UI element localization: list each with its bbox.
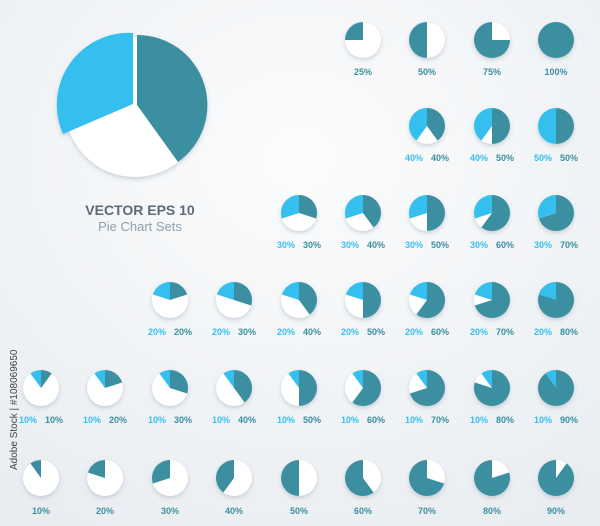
row: single teal — [23, 460, 574, 516]
row: single teal: 50% — [290, 506, 308, 516]
row: single teal: 70% — [418, 506, 436, 516]
row: 10% blue: 70% — [431, 415, 449, 425]
row: 10% blue: 90% — [560, 415, 578, 425]
row: 30% blue — [277, 195, 578, 250]
row: 20% blue: 20% — [277, 327, 295, 337]
row: 10% blue: 10% — [212, 415, 230, 425]
row: 10% blue: 10% — [277, 415, 295, 425]
row: 20% blue: 40% — [303, 327, 321, 337]
row: 20% blue — [148, 282, 578, 337]
row: 20% blue: 20% — [405, 327, 423, 337]
row: 10% blue: 10% — [405, 415, 423, 425]
row: quarters: 25% — [354, 67, 372, 77]
row: 20% blue: 20% — [212, 327, 230, 337]
row: 10% blue: 10% — [19, 415, 37, 425]
row: 10% blue: 10% — [148, 415, 166, 425]
row: single teal: 80% — [483, 506, 501, 516]
row: 20% blue: 30% — [238, 327, 256, 337]
title: Pie Chart Sets — [98, 219, 182, 234]
row: 10% blue — [19, 370, 578, 425]
big pie chart — [57, 33, 207, 177]
row: 30% blue: 30% — [470, 240, 488, 250]
row: 40/50: 40% — [405, 153, 423, 163]
row: 40/50: 50% — [560, 153, 578, 163]
row: quarters: 50% — [418, 67, 436, 77]
row: single teal: 40% — [225, 506, 243, 516]
row: 10% blue: 40% — [238, 415, 256, 425]
row: 10% blue: 10% — [534, 415, 552, 425]
row: 30% blue: 30% — [405, 240, 423, 250]
row: 20% blue: 50% — [367, 327, 385, 337]
row: 40/50 — [405, 108, 578, 163]
row: 40/50: 50% — [496, 153, 514, 163]
row: single teal: 10% — [32, 506, 50, 516]
row: single teal: 20% — [96, 506, 114, 516]
row: 30% blue: 30% — [341, 240, 359, 250]
row: 40/50: 40% — [431, 153, 449, 163]
row: 20% blue: 20% — [470, 327, 488, 337]
row: 40/50: 50% — [534, 153, 552, 163]
row: 10% blue: 10% — [470, 415, 488, 425]
row: 30% blue: 70% — [560, 240, 578, 250]
row: 40/50: 40% — [470, 153, 488, 163]
watermark credit: Adobe Stock | #108069650 — [9, 349, 20, 470]
row: 30% blue: 40% — [367, 240, 385, 250]
row: 10% blue: 60% — [367, 415, 385, 425]
row: 10% blue: 10% — [45, 415, 63, 425]
row: single teal: 60% — [354, 506, 372, 516]
title: VECTOR EPS 10 — [85, 202, 195, 218]
row: single teal: 90% — [547, 506, 565, 516]
row: 20% blue: 20% — [341, 327, 359, 337]
row: 30% blue: 30% — [534, 240, 552, 250]
row: 20% blue: 20% — [174, 327, 192, 337]
row: quarters: 100% — [544, 67, 568, 77]
row: 20% blue: 80% — [560, 327, 578, 337]
row: 20% blue: 70% — [496, 327, 514, 337]
row: 30% blue: 50% — [431, 240, 449, 250]
row: 20% blue: 20% — [534, 327, 552, 337]
row: 20% blue: 20% — [148, 327, 166, 337]
row: 30% blue: 30% — [277, 240, 295, 250]
row: 10% blue: 30% — [174, 415, 192, 425]
row: 10% blue: 50% — [303, 415, 321, 425]
row: 10% blue: 20% — [109, 415, 127, 425]
row: 20% blue: 60% — [431, 327, 449, 337]
row: 10% blue: 80% — [496, 415, 514, 425]
row: 10% blue: 10% — [83, 415, 101, 425]
row: quarters: 75% — [483, 67, 501, 77]
title — [85, 202, 195, 234]
row: single teal: 30% — [161, 506, 179, 516]
row: quarters — [345, 22, 574, 77]
row: 30% blue: 60% — [496, 240, 514, 250]
row: 10% blue: 10% — [341, 415, 359, 425]
row: 30% blue: 30% — [303, 240, 321, 250]
